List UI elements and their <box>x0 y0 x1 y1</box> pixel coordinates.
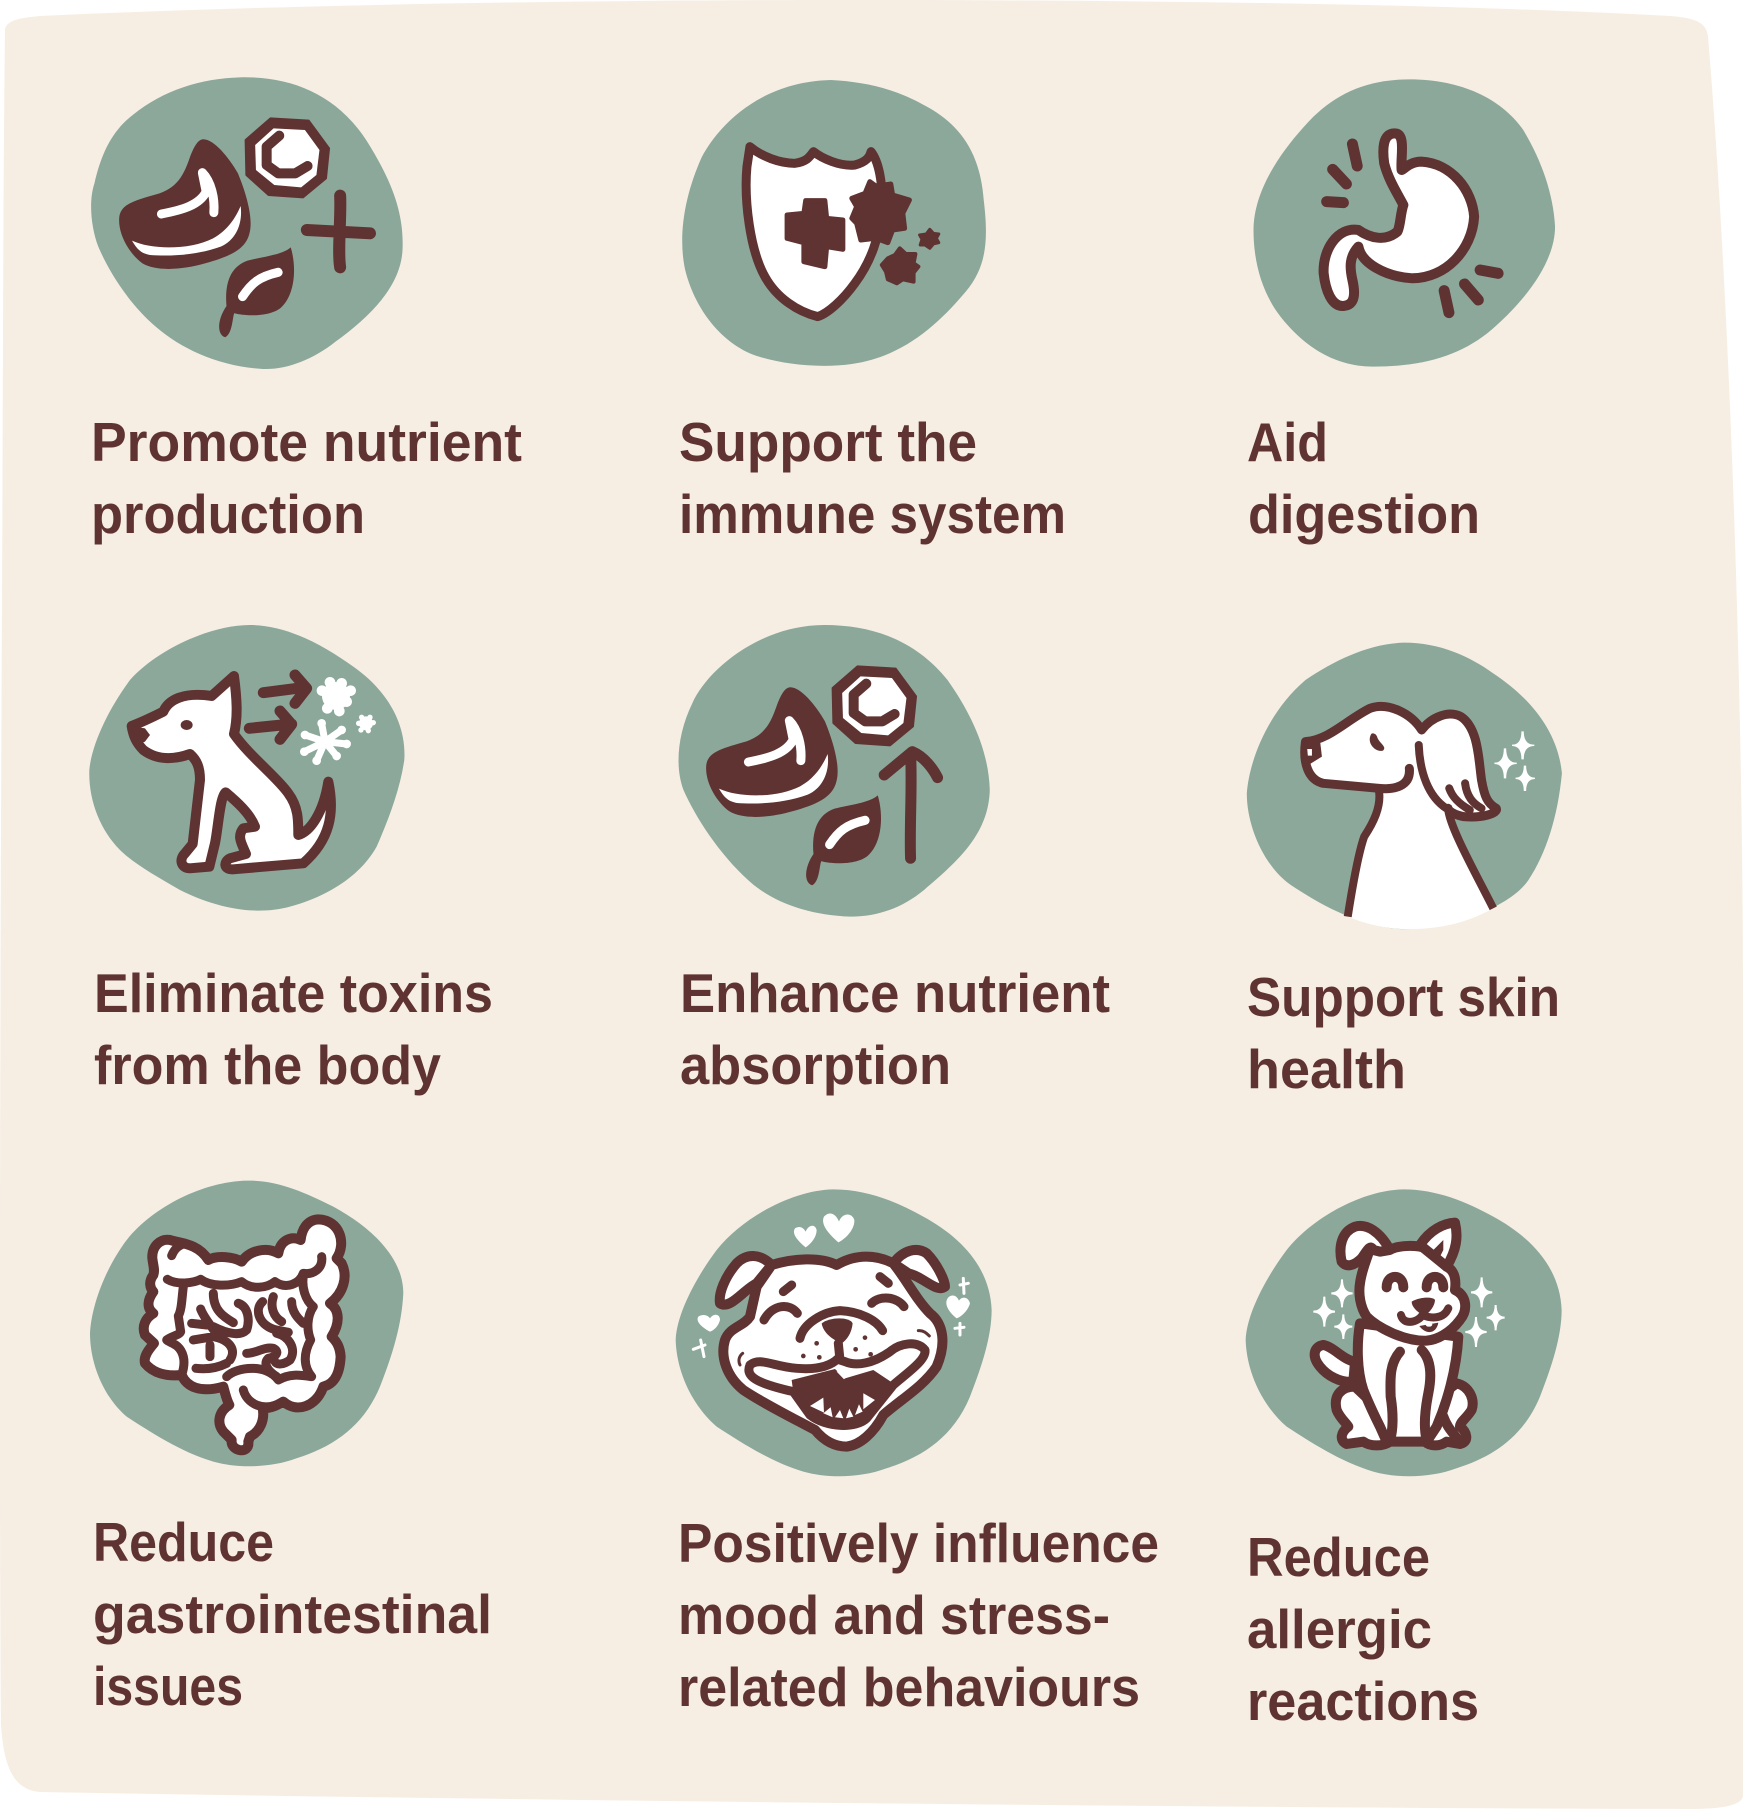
icon: smiling bulldog with hearts <box>676 1189 992 1476</box>
text: enhance nutrient absorption <box>680 962 1110 1096</box>
text: reduce allergic reactions <box>1247 1526 1479 1732</box>
text: enhance nutrient absorption: Enhance nutrient <box>680 962 1110 1024</box>
panel: aid digestion <box>1247 79 1555 545</box>
text: reduce gastrointestinal issues: Reduce <box>93 1511 274 1573</box>
text: reduce gastrointestinal issues: issues <box>93 1655 243 1717</box>
text: reduce gastrointestinal issues <box>93 1511 492 1717</box>
text: enhance nutrient absorption: absorption <box>680 1034 951 1096</box>
text: support skin health: health <box>1247 1038 1406 1100</box>
panel: promote nutrient production <box>91 77 522 545</box>
text: promote nutrient production: production <box>91 483 365 545</box>
icon: dog with shiny coat <box>1247 643 1562 929</box>
panel: reduce gastrointestinal issues <box>90 1181 492 1717</box>
text: support skin health <box>1247 966 1560 1100</box>
text: positively influence mood: related behaviours <box>678 1656 1140 1718</box>
text: reduce gastrointestinal issues: gastrointestinal <box>93 1583 492 1645</box>
text: reduce allergic reactions: reactions <box>1247 1670 1479 1732</box>
text: eliminate toxins from the body <box>94 962 493 1096</box>
icon: meat, vitamin, leaf and plus <box>91 77 403 369</box>
icon: intestines <box>90 1181 403 1466</box>
text: eliminate toxins from the body: from the body <box>94 1034 441 1096</box>
text: positively influence mood: Positively influence <box>678 1512 1159 1574</box>
text: support the immune system <box>679 411 1066 545</box>
icon: shield and germs <box>682 80 986 366</box>
text: support the immune system: Support the <box>679 411 977 473</box>
text: reduce allergic reactions: Reduce <box>1247 1526 1430 1588</box>
text: eliminate toxins from the body: Eliminate toxins <box>94 962 493 1024</box>
panel: support skin health <box>1247 643 1562 1100</box>
text: positively influence mood: mood and stress- <box>678 1584 1110 1646</box>
text: support the immune system: immune system <box>679 483 1066 545</box>
icon: stomach <box>1254 79 1555 367</box>
panel: support the immune system <box>679 80 1066 545</box>
text: aid digestion: Aid <box>1247 411 1328 473</box>
text: reduce allergic reactions: allergic <box>1247 1598 1432 1660</box>
panel: positively influence mood <box>676 1189 1159 1718</box>
text: aid digestion: digestion <box>1248 483 1480 545</box>
text: positively influence mood <box>678 1512 1159 1718</box>
icon: meat, vitamin, leaf and up arrow <box>679 625 990 917</box>
icon: happy sitting dog <box>1246 1189 1562 1476</box>
text: aid digestion <box>1247 411 1480 545</box>
panel: eliminate toxins from the body <box>89 625 493 1096</box>
panel: reduce allergic reactions <box>1246 1189 1562 1732</box>
text: promote nutrient production <box>91 411 522 545</box>
icon: dog expelling toxins <box>89 625 404 911</box>
panel: enhance nutrient absorption <box>679 625 1110 1096</box>
text: promote nutrient production: Promote nutrient <box>91 411 522 473</box>
text: support skin health: Support skin <box>1247 966 1560 1028</box>
